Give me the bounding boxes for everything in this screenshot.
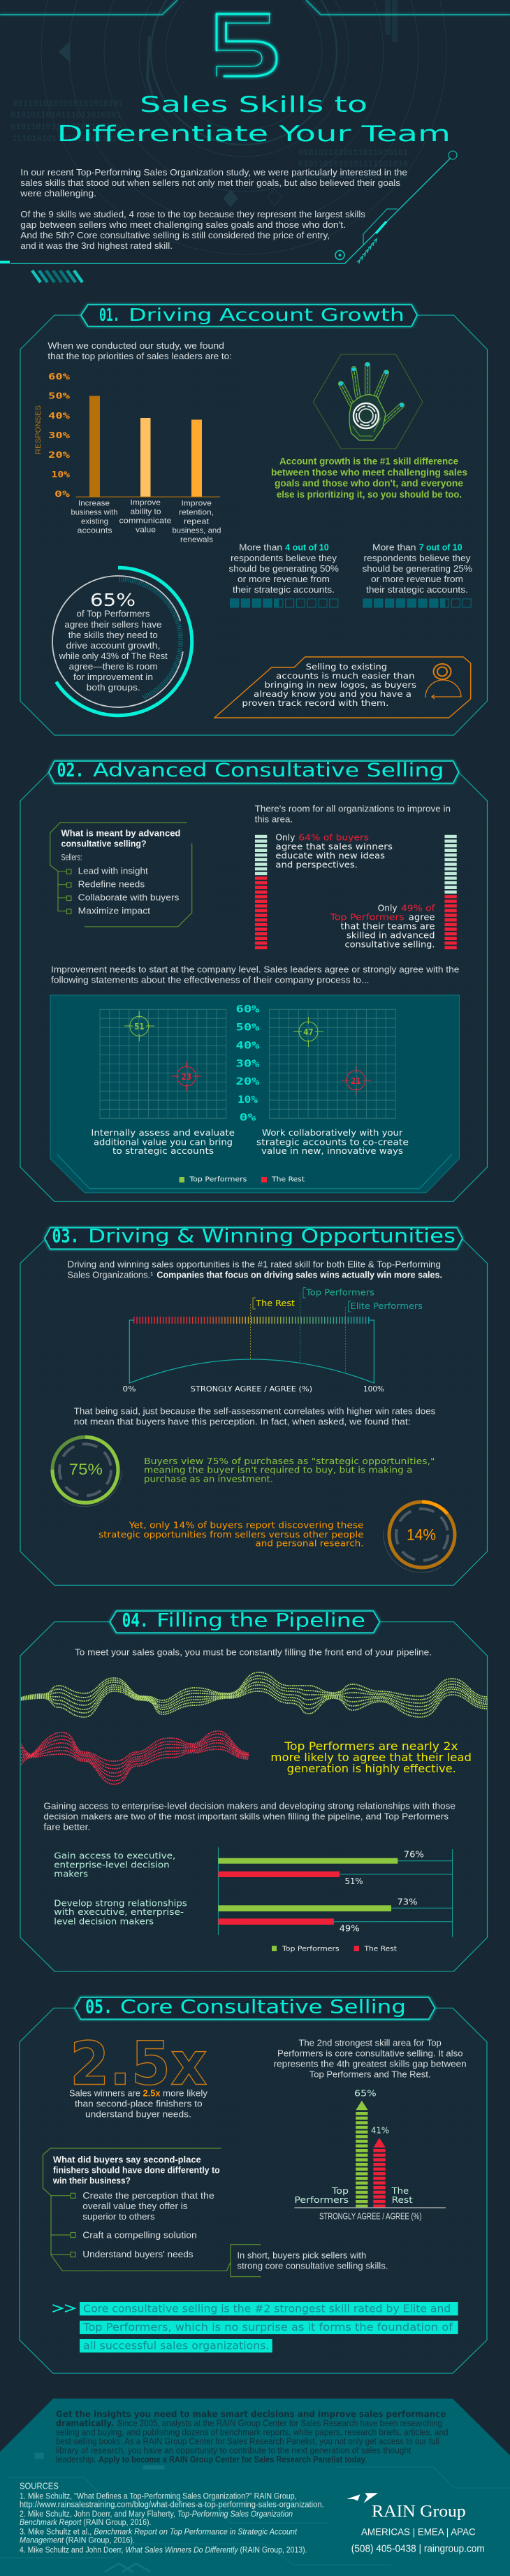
text: sales winners 2.5x: Sales winners are (69, 2088, 140, 2098)
heading: section 05 (75, 1997, 435, 2019)
definition box: Redefine needs (78, 880, 145, 890)
callout: core consultative selling highlight: all successful sales organizations. (83, 2340, 269, 2352)
legend: The Rest (271, 1176, 305, 1184)
heading: section 03 (45, 1225, 462, 1249)
bar labels: renewals (180, 536, 214, 544)
icon row: 7.5 of 10 squares (363, 599, 471, 607)
text: top priorities intro: that the top priorities of sales leaders are to: (48, 352, 232, 361)
caption: right chart: Work collaboratively with your (262, 1128, 402, 1138)
text: get the insights: leadership. (56, 2455, 96, 2465)
icon: circuit hand in hexagon (313, 354, 423, 449)
stat: 7 out of 10: their strategic accounts. (366, 585, 468, 595)
shared y axis labels (236, 1004, 260, 1124)
stat: 7 out of 10 (362, 543, 472, 607)
stat text: 49% of top performers: skilled in advanced (347, 931, 435, 941)
stat text: only 14%: Yet, only 14% of buyers report discovering these (129, 1521, 364, 1531)
stat ring: 65% of top performers: both groups. (87, 683, 140, 693)
red arrow bar (373, 2138, 386, 2208)
title: Differentiate Your Team (57, 122, 451, 147)
heading: section 02: 02. (57, 760, 84, 781)
legend: Top Performers (189, 1176, 247, 1184)
sources: http://www.rainsalestraining.com/blog/what-defines-a-top-performing-sales-organization. (20, 2501, 324, 2509)
category labels: enterprise-level decision (54, 1860, 170, 1869)
text: room to improve: this area. (255, 815, 293, 825)
decorative stripes (32, 270, 82, 282)
text: second strongest skill area: Performers is core consultative selling. It also (277, 2049, 463, 2059)
bars (75, 396, 220, 497)
logo: RAIN Group: RAIN Group (372, 2503, 466, 2521)
value labels: 73% (397, 1897, 418, 1906)
stat: 4 out of 10: or more revenue from (238, 574, 330, 584)
green arrow bar (356, 2101, 368, 2208)
labels (294, 2088, 413, 2205)
category labels: Develop strong relationships (54, 1898, 187, 1908)
text: improvement needs: Improvement needs to start at the company level. Sales leaders agree or strongly agree with the (51, 965, 459, 975)
bar labels (71, 499, 221, 544)
shared y axis labels: 40% (236, 1040, 260, 1051)
binary code decoration: 0101101010101111101010 (298, 159, 408, 169)
shared y axis labels: 0% (240, 1113, 256, 1124)
chart: red the rest wave (21, 1731, 249, 1784)
category labels: makers (54, 1869, 88, 1879)
sources (20, 2482, 324, 2554)
text: get the insights: Apply to become a RAIN Group Center for Sales Research Panelist today. (99, 2455, 367, 2465)
chart: arrow bars 65% vs 41% (294, 2088, 446, 2222)
stat ring: 65% of top performers: the skills they need to (68, 630, 158, 640)
bar labels: business with (71, 509, 117, 517)
shared y axis labels: 60% (236, 1004, 260, 1015)
marker: top performers: Top Performers (305, 1287, 374, 1297)
stat text: only 14%: and personal research. (256, 1539, 363, 1549)
y axis labels: 30% (48, 430, 71, 440)
heading: section 02 (49, 760, 458, 783)
text: second strongest skill area: Top Performers and The Rest. (309, 2070, 430, 2080)
target: 51 top performers (124, 1011, 154, 1041)
y axis labels: 50% (48, 391, 71, 401)
stat text: 49% of top performers: Only (378, 903, 398, 913)
callout: core consultative selling highlight: Top Performers, which is no surprise as it forms the foundation of (82, 2321, 453, 2333)
value labels: 51% (345, 1876, 363, 1886)
y axis labels: 10% (52, 470, 71, 479)
stat: 4 out of 10: should be generating 50% (229, 564, 339, 574)
bars (218, 1858, 398, 1925)
shared y axis labels: 10% (238, 1094, 258, 1106)
stat ring: 65% of top performers (43, 567, 193, 716)
question box: second-place finishers (43, 2148, 231, 2271)
stat ring: 75% (52, 1437, 122, 1507)
stat: 7 out of 10: 7 out of 10 (419, 543, 462, 553)
bar chart: access and relationships (54, 1847, 453, 1953)
legend (179, 1176, 305, 1184)
labels: 41% (371, 2126, 389, 2136)
labels: Top (331, 2186, 349, 2196)
stat text: 49% of top performers: that their teams are (341, 921, 435, 931)
header background rings (41, 0, 446, 254)
callout: selling to existing accounts: accounts is much easier than (276, 671, 415, 681)
legend: Top Performers (282, 1945, 340, 1953)
sources: 3. Mike Schultz et al., Benchmark Report on Top Performance in Strategic Account (20, 2528, 298, 2537)
category labels: level decision makers (54, 1916, 154, 1926)
callout: selling to existing accounts (214, 657, 471, 718)
text: room to improve (255, 804, 451, 825)
panel: 05 core consultative selling (20, 1997, 487, 2373)
shared y axis labels: 50% (236, 1022, 260, 1033)
icon: double chevron (52, 2305, 75, 2312)
bar labels: communicate (119, 517, 172, 526)
text: second strongest skill area: The 2nd strongest skill area for Top (298, 2039, 442, 2048)
stat text: only 14% (99, 1521, 363, 1549)
bar labels: retention, (179, 509, 214, 517)
text: get the insights: Since 2005, analysts at the RAIN Group Center for Sales Research have been researching (117, 2419, 442, 2429)
callout: account growth is the #1 skill: between those who meet challenging sales (271, 467, 467, 477)
labels: 65% (354, 2088, 377, 2098)
marker: the rest: The Rest (255, 1298, 295, 1308)
stat text: 64% of buyers: educate with new ideas (275, 851, 385, 861)
icon: orange person with cycle arrow (425, 664, 461, 699)
target: 23 the rest: 23 (182, 1072, 191, 1082)
text: in short (231, 2245, 388, 2277)
stat: 4 out of 10: 4 out of 10 (285, 543, 329, 553)
target: 21 the rest: 21 (351, 1076, 361, 1086)
grid: right chart (270, 1009, 395, 1118)
text: get the insights: best-selling books. As a RAIN Group Center for Sales Research Panelist, you not only get access to our full (56, 2437, 439, 2447)
panel frame (20, 1622, 488, 1971)
text: number one rated skill: Companies that focus on driving sales wins actually win more sales. (156, 1270, 442, 1280)
big number 5 (217, 14, 277, 76)
stat text: buyers view 75%: purchase as an investment. (144, 1475, 273, 1484)
category labels: Gain access to executive, (54, 1851, 175, 1860)
callout: nearly 2x more likely: Top Performers are nearly 2x (284, 1739, 458, 1753)
target: 47 top performers (293, 1017, 323, 1047)
stat ring: 65% of top performers: 65% (90, 590, 136, 610)
heading: section 05: 05. (85, 1997, 112, 2018)
intro text: and it was the 3rd highest rated skill. (20, 241, 173, 251)
intro text: were challenging. (20, 189, 96, 198)
callout: account growth is the #1 skill: else is prioritizing it, so you should be too. (277, 489, 462, 500)
stat: 4 out of 10: More than (239, 543, 282, 553)
text: get the insights: selling and buying, and publishing dozens of benchmark reports, white papers, research briefs, articles, and (56, 2428, 449, 2438)
intro text (20, 168, 407, 251)
intro frame decoration (0, 151, 457, 263)
stat: 7 out of 10: should be generating 25% (362, 564, 472, 574)
text: get the insights: library of research, you have an opportunity to contribute to the next generation of sales thought (56, 2446, 411, 2456)
binary code decoration: 1110101011010101011010 (298, 171, 408, 181)
marker: elite performers: Elite Performers (351, 1301, 423, 1311)
text: number one rated skill (67, 1259, 442, 1280)
intro text: gap between sellers who meet challenging sales goals and those who don't. (20, 220, 346, 230)
title: Sales Skills to (140, 92, 367, 117)
bar labels: repeat (184, 518, 209, 526)
stat ring: 65% of top performers: while only 43% of The Rest (59, 651, 168, 661)
stat ring: 65% of top performers: agree—there is room (69, 662, 158, 672)
stat text: 49% of top performers: agree (409, 913, 435, 922)
text: get the insights: dramatically. (56, 2418, 114, 2429)
text: sales winners 2.5x: understand buyer needs. (85, 2109, 191, 2119)
panel: 01 driving account growth (20, 305, 488, 735)
stat: 7 out of 10: More than (372, 543, 416, 553)
shared y axis labels: 20% (236, 1076, 260, 1087)
bar labels: Improve (182, 499, 212, 507)
axis labels: STRONGLY AGREE / AGREE (%) (191, 1384, 312, 1394)
stat ring: 65% of top performers: drive account growth, (66, 641, 161, 651)
value labels: 49% (340, 1924, 360, 1934)
bar labels: business, and (172, 527, 221, 535)
sources: 2. Mike Schultz, John Doerr, and Mary Flaherty, Top-Performing Sales Organization (20, 2510, 293, 2519)
text: get the insights (56, 2408, 449, 2465)
target: 23 the rest (172, 1062, 201, 1091)
text: sales winners 2.5x (69, 2088, 208, 2119)
callout: nearly 2x more likely: more likely to agree that their lead (270, 1751, 472, 1764)
panel frame (20, 1239, 488, 1585)
text: in short: In short, buyers pick sellers with (237, 2251, 366, 2261)
legend (272, 1945, 397, 1953)
y axis labels: 20% (48, 450, 71, 460)
chart: self assessment scale (123, 1287, 423, 1394)
sources: Management (RAIN Group, 2016). (20, 2537, 135, 2545)
text: improvement needs (51, 965, 459, 985)
axis labels: 100% (363, 1384, 384, 1394)
text: gaining access: Gaining access to enterprise-level decision makers and developing strong relationships with those (43, 1801, 456, 1811)
text: sales winners 2.5x: 2.5x (143, 2088, 161, 2098)
text: second strongest skill area: represents the 4th greatest skills gap between (274, 2060, 467, 2069)
text: gaining access: fare better. (43, 1822, 90, 1832)
value labels: 76% (404, 1850, 424, 1860)
y axis labels (48, 372, 71, 499)
chart: arrow bars 65% vs 41%: STRONGLY AGREE / AGREE (%) (319, 2212, 421, 2222)
callout: account growth is the #1 skill: goals and those who don't, and everyone (275, 478, 463, 489)
question box: second-place finishers: Understand buyers' needs (82, 2250, 194, 2259)
heading: section 05: Core Consultative Selling (120, 1997, 406, 2018)
definition box: Collaborate with buyers (78, 893, 179, 903)
heading: section 03: 03. (52, 1225, 80, 1247)
definition box (50, 823, 192, 927)
stat text: buyers view 75%: meaning the buyer isn't required to buy, but is making a (144, 1466, 412, 1475)
question box: second-place finishers: superior to others (82, 2212, 155, 2222)
stat text: 64% of buyers: agree that sales winners (275, 842, 393, 852)
footer background (0, 2398, 510, 2576)
callout: selling to existing accounts: already know you and you have a (254, 689, 411, 699)
callout: nearly 2x more likely (270, 1739, 472, 1775)
stat ring: 65% of top performers: for improvement in (73, 672, 153, 682)
text: gaining access (43, 1801, 456, 1832)
callout: selling to existing accounts: bringing in new logos, as buyers (264, 680, 416, 690)
panel: 02 advanced consultative selling (20, 760, 488, 1201)
text: meet your sales goals: To meet your sales goals, you must be constantly filling the front end of your pipeline. (75, 1647, 432, 1657)
axis labels: 0% (123, 1384, 136, 1394)
intro text: Of the 9 skills we studied, 4 rose to the top because they represent the largest skills (20, 210, 365, 219)
target: 51 top performers: 51 (134, 1022, 145, 1032)
text: improvement needs: following statements about the effectiveness of their company process to... (51, 976, 369, 985)
shared y axis labels: 30% (236, 1058, 260, 1069)
heading: section 02: Advanced Consultative Selling (93, 760, 444, 781)
text: in short: strong core consultative selling skills. (237, 2262, 388, 2271)
caption: right chart: value in new, innovative ways (261, 1146, 403, 1156)
intro text: sales skills that stood out when sellers not only met their goals, but also believed their goals (20, 178, 400, 188)
target: 47 top performers: 47 (303, 1027, 314, 1037)
heading: section 03: Driving & Winning Opportunities (88, 1225, 456, 1247)
progress stack: 64% of buyers (255, 835, 267, 950)
binary code decoration: 0101011010111011010101 (10, 110, 122, 120)
bar labels: Increase (78, 499, 110, 507)
panel frame (20, 772, 488, 1201)
title (57, 92, 451, 147)
chart: green top performers wave (21, 1672, 488, 1717)
text: number one rated skill: Sales Organizations.¹ (67, 1270, 153, 1280)
definition box: Maximize impact (78, 906, 151, 916)
stat: 4 out of 10: their strategic accounts. (233, 585, 335, 595)
legend: The Rest (363, 1945, 397, 1953)
stat text: buyers view 75%: Buyers view 75% of purchases as "strategic opportunities," (144, 1456, 435, 1466)
text: top priorities intro: When we conducted our study, we found (48, 341, 224, 351)
definition box: What is meant by advanced (61, 829, 180, 839)
stat text: 49% of top performers: 49% of (401, 903, 435, 913)
panel frame (20, 2008, 487, 2373)
grid: left chart (100, 1009, 226, 1118)
stat ring: 65% of top performers: agree their sellers have (64, 620, 161, 630)
heading: section 01: 01. (99, 305, 120, 325)
callout: selling to existing accounts: proven track record with them. (242, 698, 388, 708)
stat text: 64% of buyers: and perspectives. (275, 860, 358, 870)
callout: core consultative selling highlight (52, 2302, 458, 2352)
text: that being said: not mean that buyers have this perception. In fact, when asked, we found that: (74, 1417, 411, 1426)
sources: SOURCES (20, 2482, 59, 2491)
category labels (54, 1851, 187, 1926)
stat text: 49% of top performers: Top Performers (329, 913, 405, 922)
heading: section 04: Filling the Pipeline (156, 1609, 365, 1631)
y axis labels: 40% (48, 411, 71, 421)
bar labels: Improve (130, 499, 161, 507)
y axis labels: 0% (54, 489, 71, 499)
labels: Performers (294, 2195, 349, 2205)
stat text: 49% of top performers (329, 903, 435, 950)
panel: 04 filling the pipeline (20, 1609, 488, 1971)
caption: right chart: strategic accounts to co-create (256, 1137, 409, 1147)
value labels (340, 1850, 424, 1934)
sources: Benchmark Report (RAIN Group, 2016). (20, 2519, 151, 2527)
definition box: Sellers: (61, 853, 82, 862)
binary code decoration: 0101101011010101110110 (10, 122, 121, 132)
category labels: with executive, enterprise- (54, 1907, 184, 1917)
stat text: buyers view 75% (144, 1456, 435, 1484)
binary code decoration: 0111010101010101010101 (13, 99, 124, 109)
big stat: 2.5x outline: 2.5x (70, 2029, 207, 2099)
caption: left chart: additional value you can bring (94, 1137, 233, 1147)
heading: section 01: Driving Account Growth (129, 305, 405, 325)
text: gaining access: decision makers are two of the most important skills when filling the pipeline, and Top Performers (43, 1811, 449, 1821)
text: second strongest skill area (274, 2039, 467, 2080)
definition box: Lead with insight (78, 867, 148, 876)
panel: footer call to action (0, 2398, 510, 2576)
panel: 03 driving and winning opportunities (20, 1225, 488, 1585)
text: number one rated skill: Driving and winning sales opportunities is the #1 rated skill for both Elite & Top-Performing (67, 1259, 441, 1269)
bar chart: sales leader priorities (34, 372, 221, 544)
sources: 1. Mike Schultz, "What Defines a Top-Performing Sales Organization?" RAIN Group, (20, 2492, 297, 2501)
question box: second-place finishers: overall value they offer is (82, 2201, 188, 2211)
stat ring: 75%: 75% (69, 1461, 103, 1478)
callout: account growth is the #1 skill: Account growth is the #1 skill difference (279, 456, 458, 466)
bar labels: accounts (77, 527, 112, 535)
callout: selling to existing accounts: Selling to existing (306, 662, 387, 672)
question box: second-place finishers: Create the perception that the (82, 2191, 214, 2201)
question box: second-place finishers: What did buyers say second-place (53, 2155, 201, 2164)
contact details: AMERICAS | EMEA | APAC (361, 2526, 476, 2537)
sources: 4. Mike Schultz and John Doerr, What Sales Winners Do Differently (RAIN Group, 2013). (20, 2546, 307, 2554)
heading: section 01 (81, 305, 417, 326)
stat text: only 14%: strategic opportunities from sellers versus other people (99, 1530, 363, 1540)
text: that being said (74, 1406, 435, 1426)
caption: left chart (91, 1128, 235, 1156)
icon row: 4.5 of 10 squares (231, 599, 338, 607)
bar labels: value (136, 526, 156, 534)
question box: second-place finishers: Craft a compelling solution (82, 2230, 197, 2240)
panel frame (20, 315, 488, 735)
text: that being said: That being said, just because the self-assessment correlates with higher win rates does (74, 1406, 435, 1416)
labels: The (391, 2186, 409, 2196)
heading: section 04 (110, 1609, 379, 1633)
axis labels (123, 1384, 384, 1394)
target: 21 the rest (341, 1066, 371, 1095)
stat ring: 14%: 14% (407, 1526, 436, 1543)
contact details (351, 2526, 485, 2555)
header frame lines (0, 0, 510, 15)
stat: 7 out of 10: respondents believe they (363, 553, 471, 563)
bar labels: ability to (130, 507, 161, 516)
callout: core consultative selling highlight: Core consultative selling is the #2 strongest skill rated by Elite and (83, 2302, 451, 2315)
stat: 7 out of 10: or more revenue from (371, 574, 463, 584)
caption: right chart (256, 1128, 409, 1156)
stat text: 49% of top performers: consultative selling. (345, 940, 435, 950)
caption: left chart: to strategic accounts (112, 1146, 214, 1156)
chart panel: company process targets (50, 995, 459, 1193)
stat text: 64% of buyers: 64% of buyers (298, 833, 369, 843)
caption: left chart: Internally assess and evaluate (91, 1128, 235, 1138)
stat text: 64% of buyers (275, 833, 393, 870)
text: room to improve: There's room for all organizations to improve in (255, 804, 451, 814)
text: sales winners 2.5x: than second-place finishers to (75, 2099, 203, 2108)
y axis labels: 60% (48, 372, 71, 382)
contact details: (508) 405-0438 | raingroup.com (351, 2543, 485, 2555)
text: get the insights: Get the insights you need to make smart decisions and improve sales performance (56, 2408, 446, 2419)
intro text: And the 5th? Core consultative selling is still considered the price of entry, (20, 231, 330, 240)
stat ring: 14% (384, 1502, 455, 1572)
labels: Rest (392, 2195, 413, 2205)
question box: second-place finishers: finishers should have done differently to (53, 2165, 220, 2175)
definition box: consultative selling? (61, 839, 147, 849)
stat ring: 65% of top performers: of Top Performers (77, 609, 150, 619)
text: top priorities intro (48, 341, 232, 361)
intro text: In our recent Top-Performing Sales Organization study, we were particularly interested in the (20, 168, 407, 178)
progress stack: 49% of top performers (444, 835, 457, 950)
circuit decoration (0, 2453, 510, 2572)
stat: 4 out of 10: respondents believe they (231, 553, 337, 563)
stat text: 64% of buyers: Only (275, 833, 295, 843)
text: sales winners 2.5x: more likely (163, 2088, 208, 2098)
callout: nearly 2x more likely: generation is highly effective. (287, 1762, 456, 1775)
callout: account growth is the #1 skill (271, 456, 467, 500)
question box: second-place finishers: win their business? (52, 2176, 131, 2185)
binary code decoration (10, 99, 408, 181)
heading: section 04: 04. (122, 1609, 149, 1631)
binary code decoration: 1110101011010101011010 (12, 133, 122, 144)
stat: 4 out of 10 (229, 543, 339, 607)
binary code decoration: 0101011010111011010101 (298, 147, 408, 158)
y axis title: RESPONSES (34, 405, 43, 454)
logo: RAIN Group (347, 2493, 466, 2521)
bar labels: existing (81, 518, 108, 526)
